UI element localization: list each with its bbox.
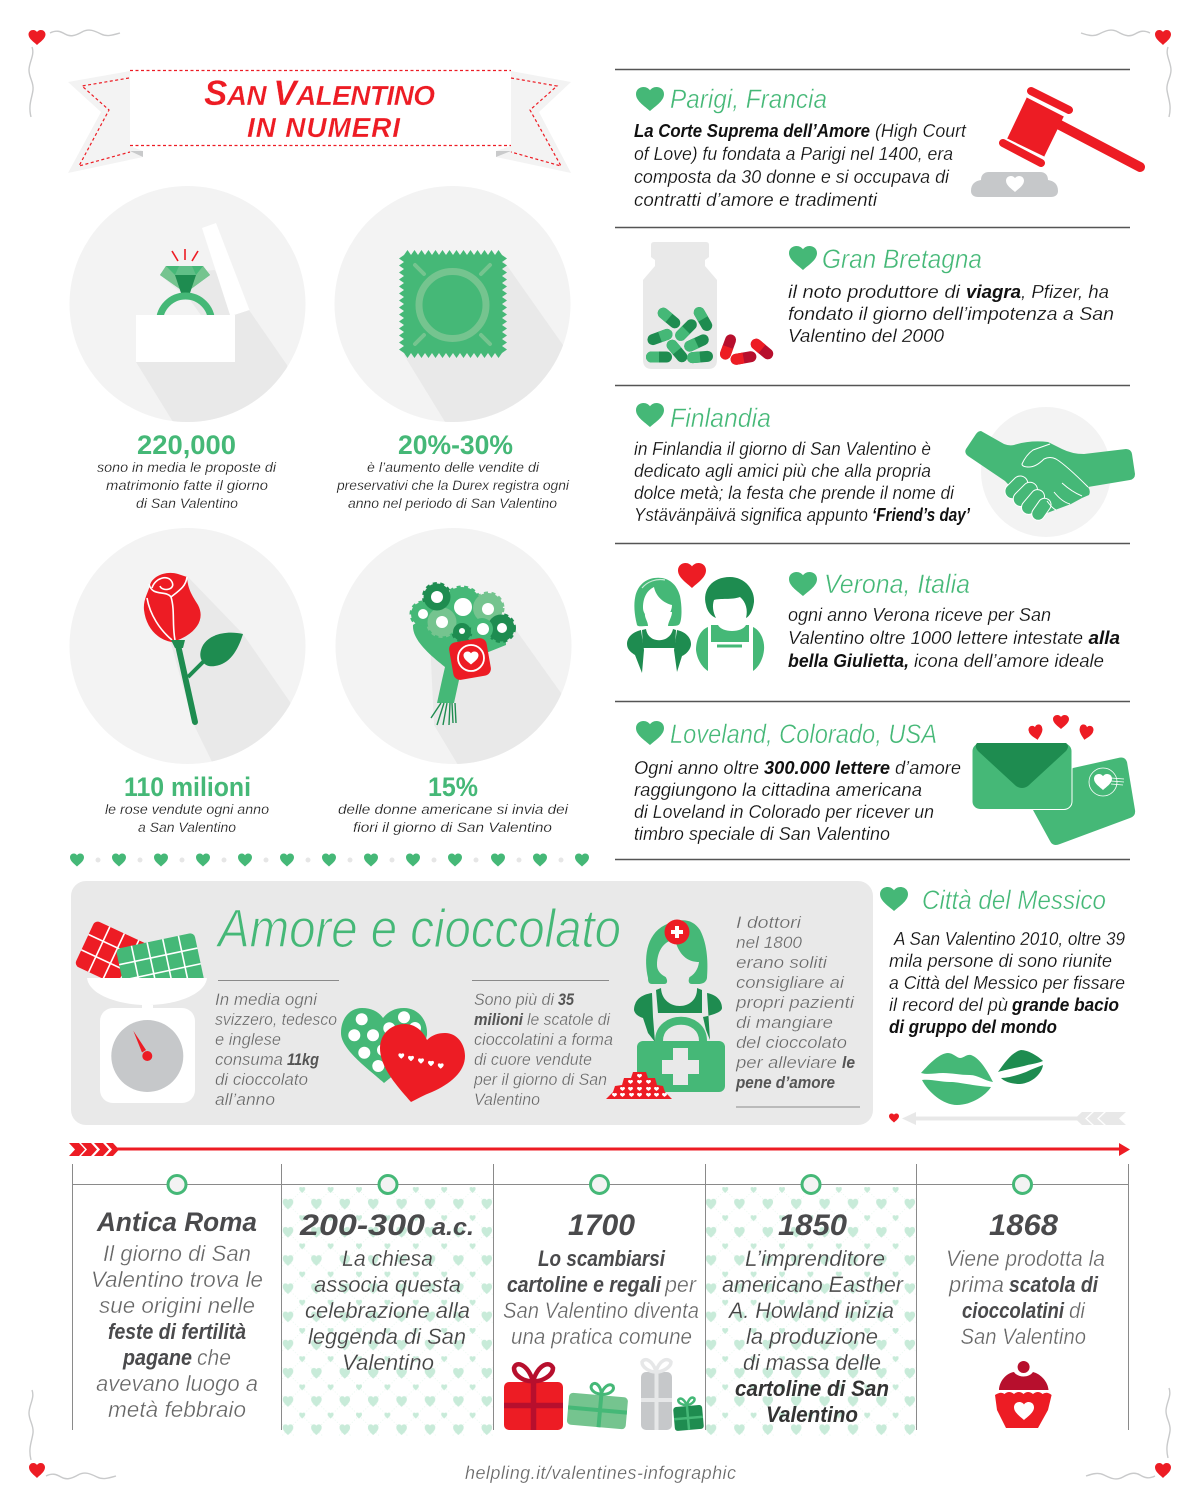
title banner: SAN VALENTINO	[204, 74, 435, 113]
icon: gavel	[971, 91, 1140, 197]
stat: condom: è l’aumento delle vendite di	[367, 459, 540, 475]
panel: Città del Messico: Città del Messico	[922, 885, 1106, 915]
text: 35 milioni	[473, 990, 613, 1109]
icon: nurse with medical bag	[606, 920, 725, 1099]
text: doctors: nel 1800	[736, 933, 803, 952]
timeline: 200-300 a.c.: a.c.	[432, 1214, 474, 1241]
panel: Finlandia: Finlandia	[670, 403, 771, 433]
stat: rose: 110 milioni	[124, 772, 251, 802]
icon: lips	[921, 1050, 1043, 1105]
timeline: 1850: di massa delle	[743, 1350, 881, 1375]
timeline: 1850: A. Howland inizia	[727, 1298, 894, 1323]
small arrow with heart	[889, 1112, 1126, 1125]
text: 35 milioni: per il giorno di San	[473, 1070, 607, 1089]
panel: Amore e cioccolato	[71, 881, 873, 1125]
icon: cupcake	[995, 1361, 1052, 1428]
panel: Città del Messico: di gruppo del mondo	[889, 1017, 1057, 1037]
panel: Città del Messico: A San Valentino 2010, oltre 39	[893, 929, 1125, 949]
timeline: Antica Roma: pagane	[122, 1345, 192, 1370]
panel: Gran Bretagna: il noto produttore di	[788, 282, 961, 302]
text: doctors: erano soliti	[736, 953, 828, 972]
timeline: 1700: per	[664, 1272, 698, 1297]
timeline: 1850: Valentino	[766, 1402, 858, 1427]
text: doctors: pene d’amore	[735, 1073, 835, 1092]
timeline: Antica Roma	[91, 1176, 263, 1422]
icon: envelopes and hearts	[972, 715, 1135, 845]
stat: engagement ring: di San Valentino	[136, 495, 238, 511]
timeline arrow	[69, 1143, 1130, 1156]
panel: Loveland: Ogni anno oltre	[634, 758, 759, 778]
panel: Parigi: composta da 30 donne e si occupava di	[634, 167, 950, 187]
corner ornament: top right	[1081, 30, 1171, 117]
timeline: 1850: cartoline di San	[735, 1376, 889, 1401]
text: 11kg of chocolate: svizzero, tedesco	[215, 1010, 337, 1029]
timeline: 1868: prima	[948, 1272, 1004, 1297]
text: 35 milioni: Valentino	[474, 1090, 540, 1109]
stat: rose: a San Valentino	[138, 819, 236, 835]
panel: Loveland: timbro speciale di San Valentino	[634, 824, 890, 844]
text: 11kg of chocolate: consuma	[215, 1050, 283, 1069]
timeline: 200-300 a.c.: La chiesa	[342, 1246, 433, 1271]
icon: chocolate pile	[606, 1072, 672, 1099]
icon: handshake	[965, 407, 1135, 537]
panel: Loveland	[634, 715, 1135, 845]
timeline: 1868: Viene prodotta la	[946, 1246, 1105, 1271]
stat: bouquet	[336, 528, 590, 835]
timeline: 200-300 a.c.: leggenda di San	[308, 1324, 466, 1349]
panel: Città del Messico: mila persone di sono riunite	[889, 951, 1112, 971]
text: 35 milioni: 35	[558, 990, 574, 1009]
timeline: 1868	[946, 1176, 1105, 1428]
timeline: 1850: 1850	[778, 1209, 847, 1242]
timeline: Antica Roma: avevano luogo a	[96, 1371, 258, 1396]
text: doctors	[735, 913, 855, 1092]
panel: Finlandia: Ystävänpäivä significa appunto	[634, 505, 868, 525]
panel: Verona: Verona, Italia	[824, 569, 970, 599]
stat: engagement ring: matrimonio fatte il giorno	[106, 477, 268, 493]
panel: Parigi: (High Court	[875, 121, 967, 141]
timeline: 200-300 a.c.: Valentino	[342, 1350, 434, 1375]
stat: bouquet: fiori il giorno di San Valentino	[353, 819, 552, 835]
timeline: Antica Roma: Il giorno di San	[103, 1241, 251, 1266]
timeline: Antica Roma: Antica Roma	[96, 1207, 257, 1237]
panel: Verona: alla	[1088, 628, 1120, 648]
panel: Gran Bretagna: , Pfizer, ha	[1021, 282, 1109, 302]
icon: pill bottle	[643, 242, 775, 369]
text: 11kg of chocolate: di cioccolato	[215, 1070, 308, 1089]
timeline: Antica Roma: metà febbraio	[108, 1397, 246, 1422]
panel: Gran Bretagna	[643, 242, 1114, 369]
timeline: 1850: americano Easther	[722, 1272, 905, 1297]
text: 35 milioni: le scatole di	[527, 1010, 611, 1029]
corner ornament: bottom left	[29, 1390, 116, 1479]
timeline: 1700: 1700	[568, 1209, 635, 1242]
timeline: 1868: di	[1069, 1298, 1086, 1323]
text: doctors: I dottori	[736, 913, 802, 932]
divider row of green hearts	[70, 854, 589, 866]
panel: Loveland: raggiungono la cittadina americana	[634, 780, 922, 800]
panel: Verona	[627, 563, 1120, 673]
panel: Finlandia	[634, 403, 1135, 537]
timeline: 1850: L’imprenditore	[745, 1246, 885, 1271]
panel: Loveland: d’amore	[895, 758, 961, 778]
timeline: 200-300 a.c.	[299, 1176, 474, 1375]
stat: condom: preservativi che la Durex registra ogni	[336, 477, 570, 493]
panel: Verona: icona dell’amore ideale	[914, 651, 1104, 671]
timeline: Antica Roma: sue origini nelle	[99, 1293, 255, 1318]
panel: Parigi: contratti d’amore e tradimenti	[634, 190, 878, 210]
timeline: 1700: Lo scambiarsi	[538, 1246, 666, 1271]
title banner: IN NUMERI	[247, 112, 401, 143]
corner ornament: top left	[28, 30, 120, 117]
panel: Finlandia: dolce metà; la festa che prende il nome di	[634, 483, 955, 503]
text: doctors: di mangiare	[736, 1013, 833, 1032]
panel: Città del Messico	[880, 885, 1126, 1125]
panel: Parigi: Parigi, Francia	[670, 84, 827, 114]
stat: condom: 20%-30%	[398, 430, 513, 460]
panel: Finlandia: in Finlandia il giorno di San Valentino è	[634, 439, 931, 459]
icon: chocolate on scale	[74, 920, 207, 1103]
title banner	[68, 70, 571, 173]
panel: Verona: Valentino oltre 1000 lettere intestate	[788, 628, 1083, 648]
timeline: 200-300 a.c.: associa questa	[314, 1272, 461, 1297]
panel: Parigi	[634, 84, 1140, 210]
stat: rose: le rose vendute ogni anno	[105, 801, 269, 817]
panel: Parigi: La Corte Suprema dell’Amore	[634, 121, 870, 141]
panel: Verona: ogni anno Verona riceve per San	[788, 605, 1051, 625]
panel: Città del Messico: a Città del Messico per fissare	[889, 973, 1125, 993]
text: doctors: propri pazienti	[735, 993, 855, 1012]
text: 11kg of chocolate: In media ogni	[215, 990, 318, 1009]
text: doctors: del cioccolato	[736, 1033, 847, 1052]
stat: engagement ring	[70, 186, 306, 511]
text: 11kg of chocolate	[215, 990, 337, 1109]
icon: couple	[627, 563, 764, 673]
timeline: 1700	[503, 1176, 704, 1431]
panel: Parigi: of Love) fu fondata a Parigi nel 1400, era	[634, 144, 953, 164]
panel: Gran Bretagna: viagra	[966, 282, 1021, 302]
panel: Loveland: di Loveland in Colorado per ricever un	[634, 802, 934, 822]
timeline: 1700: San Valentino diventa	[503, 1298, 699, 1323]
timeline: 1700: una pratica comune	[511, 1324, 692, 1349]
stat: bouquet: delle donne americane si invia dei	[338, 801, 569, 817]
stat: condom	[334, 186, 590, 511]
timeline: 1868: 1868	[989, 1209, 1058, 1242]
icon: gifts	[504, 1360, 704, 1431]
timeline: Antica Roma: feste di fertilità	[108, 1319, 246, 1344]
panel: Gran Bretagna: fondato il giorno dell’impotenza a San	[788, 304, 1114, 324]
text: doctors: le	[842, 1053, 855, 1072]
timeline: 1700: cartoline e regali	[507, 1272, 662, 1297]
timeline: 200-300 a.c.: 200-300	[299, 1209, 425, 1242]
stat: rose	[70, 528, 310, 835]
text: 35 milioni: milioni	[474, 1010, 524, 1029]
panel: Finlandia: dedicato agli amici più che alla propria	[634, 461, 931, 481]
stat: engagement ring: 220,000	[137, 430, 236, 460]
panel: Finlandia: ‘Friend’s day’	[872, 505, 971, 525]
stat: engagement ring: sono in media le proposte di	[97, 459, 277, 475]
icon: chocolate hearts	[341, 1008, 465, 1102]
panel: Loveland: 300.000 lettere	[764, 758, 890, 778]
corner ornament: bottom right	[1086, 1388, 1171, 1479]
text: 35 milioni: di cuore vendute	[474, 1050, 592, 1069]
panel: Città del Messico: il record del pù	[889, 995, 1008, 1015]
panel: Gran Bretagna: Gran Bretagna	[822, 244, 982, 274]
timeline: Antica Roma: Valentino trova le	[91, 1267, 263, 1292]
footer source: helpling.it/valentines-infographic	[465, 1463, 736, 1483]
timeline: 1868: cioccolatini	[962, 1298, 1065, 1323]
text: 11kg of chocolate: e inglese	[215, 1030, 281, 1049]
stat: bouquet: 15%	[428, 772, 478, 802]
stat: condom: anno nel periodo di San Valentino	[348, 495, 557, 511]
panel: Gran Bretagna: Valentino del 2000	[788, 326, 944, 346]
text: 35 milioni: Sono più di	[474, 990, 555, 1009]
timeline: Antica Roma: che	[197, 1345, 231, 1370]
timeline: 1868: scatola di	[1009, 1272, 1099, 1297]
heading: Amore e cioccolato: Amore e cioccolato	[215, 899, 621, 959]
timeline: 200-300 a.c.: celebrazione alla	[305, 1298, 470, 1323]
text: doctors: consigliare ai	[736, 973, 845, 992]
text: 11kg of chocolate: all’anno	[215, 1090, 275, 1109]
text: doctors: per alleviare	[735, 1053, 837, 1072]
panel: Città del Messico: grande bacio	[1011, 995, 1119, 1015]
timeline: 1850	[722, 1176, 905, 1427]
panel: Verona: bella Giulietta,	[788, 651, 909, 671]
text: 35 milioni: cioccolatini a forma	[474, 1030, 613, 1049]
panel: Loveland: Loveland, Colorado, USA	[670, 719, 937, 749]
timeline patterned backgrounds	[282, 1186, 917, 1436]
text: 11kg of chocolate: 11kg	[287, 1050, 320, 1069]
timeline: 1850: la produzione	[746, 1324, 878, 1349]
timeline: 1868: San Valentino	[960, 1324, 1086, 1349]
